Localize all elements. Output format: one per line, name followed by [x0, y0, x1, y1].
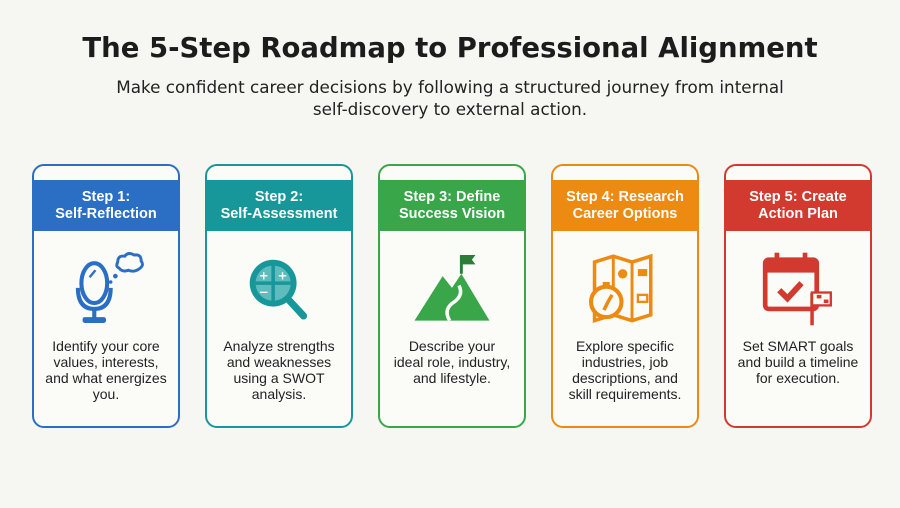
header: step 3: Step 3: Define: [404, 188, 500, 204]
text: step 5: [738, 338, 858, 386]
text: step 1: [45, 338, 167, 402]
header: step 1: [34, 180, 178, 231]
header: step 5: [726, 180, 870, 231]
text: step 5: Set SMART goals: [743, 338, 853, 354]
text: step 5: and build a timeline: [738, 354, 858, 370]
header: step 2: Self-Assessment: [221, 206, 337, 222]
text: step 4: [569, 338, 681, 402]
icon: calendar check: [762, 252, 832, 326]
icon: mountain flag: [414, 255, 490, 321]
text: step 2: Analyze strengths: [223, 338, 335, 354]
panel: step 4: [551, 164, 699, 428]
icon: magnifier SWOT: +: [259, 269, 269, 283]
text: step 2: and weaknesses: [227, 354, 331, 370]
header: step 5: Action Plan: [758, 206, 838, 222]
header: step 2: [207, 180, 351, 231]
header: step 4: Step 4: Research: [566, 188, 684, 204]
text: step 1: and what energizes: [45, 370, 167, 386]
text: step 2: [223, 338, 335, 402]
panel: step 5: [724, 164, 872, 428]
text: step 4: industries, job: [582, 354, 668, 370]
header: step 3: [380, 180, 524, 231]
panel: step 2: [205, 164, 353, 428]
title: The 5-Step Roadmap to Professional Alignment: [82, 32, 818, 64]
icon: mirror: [76, 252, 144, 323]
header: step 4: Career Options: [573, 206, 677, 222]
icon: map and compass: [589, 254, 653, 323]
header: step 1: Step 1:: [82, 188, 130, 204]
text: step 3: Describe your: [409, 338, 495, 354]
icon: magnifier SWOT: −: [259, 285, 269, 299]
text: step 5: for execution.: [756, 370, 840, 386]
text: step 4: descriptions, and: [572, 370, 678, 386]
text: step 2: analysis.: [252, 386, 306, 402]
subtitle: [116, 77, 784, 119]
panel: step 1: [32, 164, 180, 428]
text: step 4: skill requirements.: [569, 386, 681, 402]
subtitle: self-discovery to external action.: [313, 99, 587, 119]
text: step 3: and lifestyle.: [413, 370, 491, 386]
text: step 2: using a SWOT: [233, 370, 325, 386]
header: step 4: [553, 180, 697, 231]
text: step 1: you.: [93, 386, 119, 402]
text: step 1: values, interests,: [53, 354, 159, 370]
header: step 2: Step 2:: [255, 188, 303, 204]
header: step 3: Success Vision: [399, 206, 505, 222]
text: step 3: ideal role, industry,: [394, 354, 510, 370]
text: step 1: Identify your core: [52, 338, 160, 354]
subtitle: Make confident career decisions by following a structured journey from internal: [116, 77, 784, 97]
icon: magnifier SWOT: +: [278, 269, 287, 283]
icon: magnifier SWOT: [250, 260, 308, 320]
text: step 3: [394, 338, 510, 386]
header: step 1: Self-Reflection: [55, 206, 157, 222]
header: step 5: Step 5: Create: [749, 188, 847, 204]
text: step 4: Explore specific: [576, 338, 674, 354]
panel: step 3: [378, 164, 526, 428]
